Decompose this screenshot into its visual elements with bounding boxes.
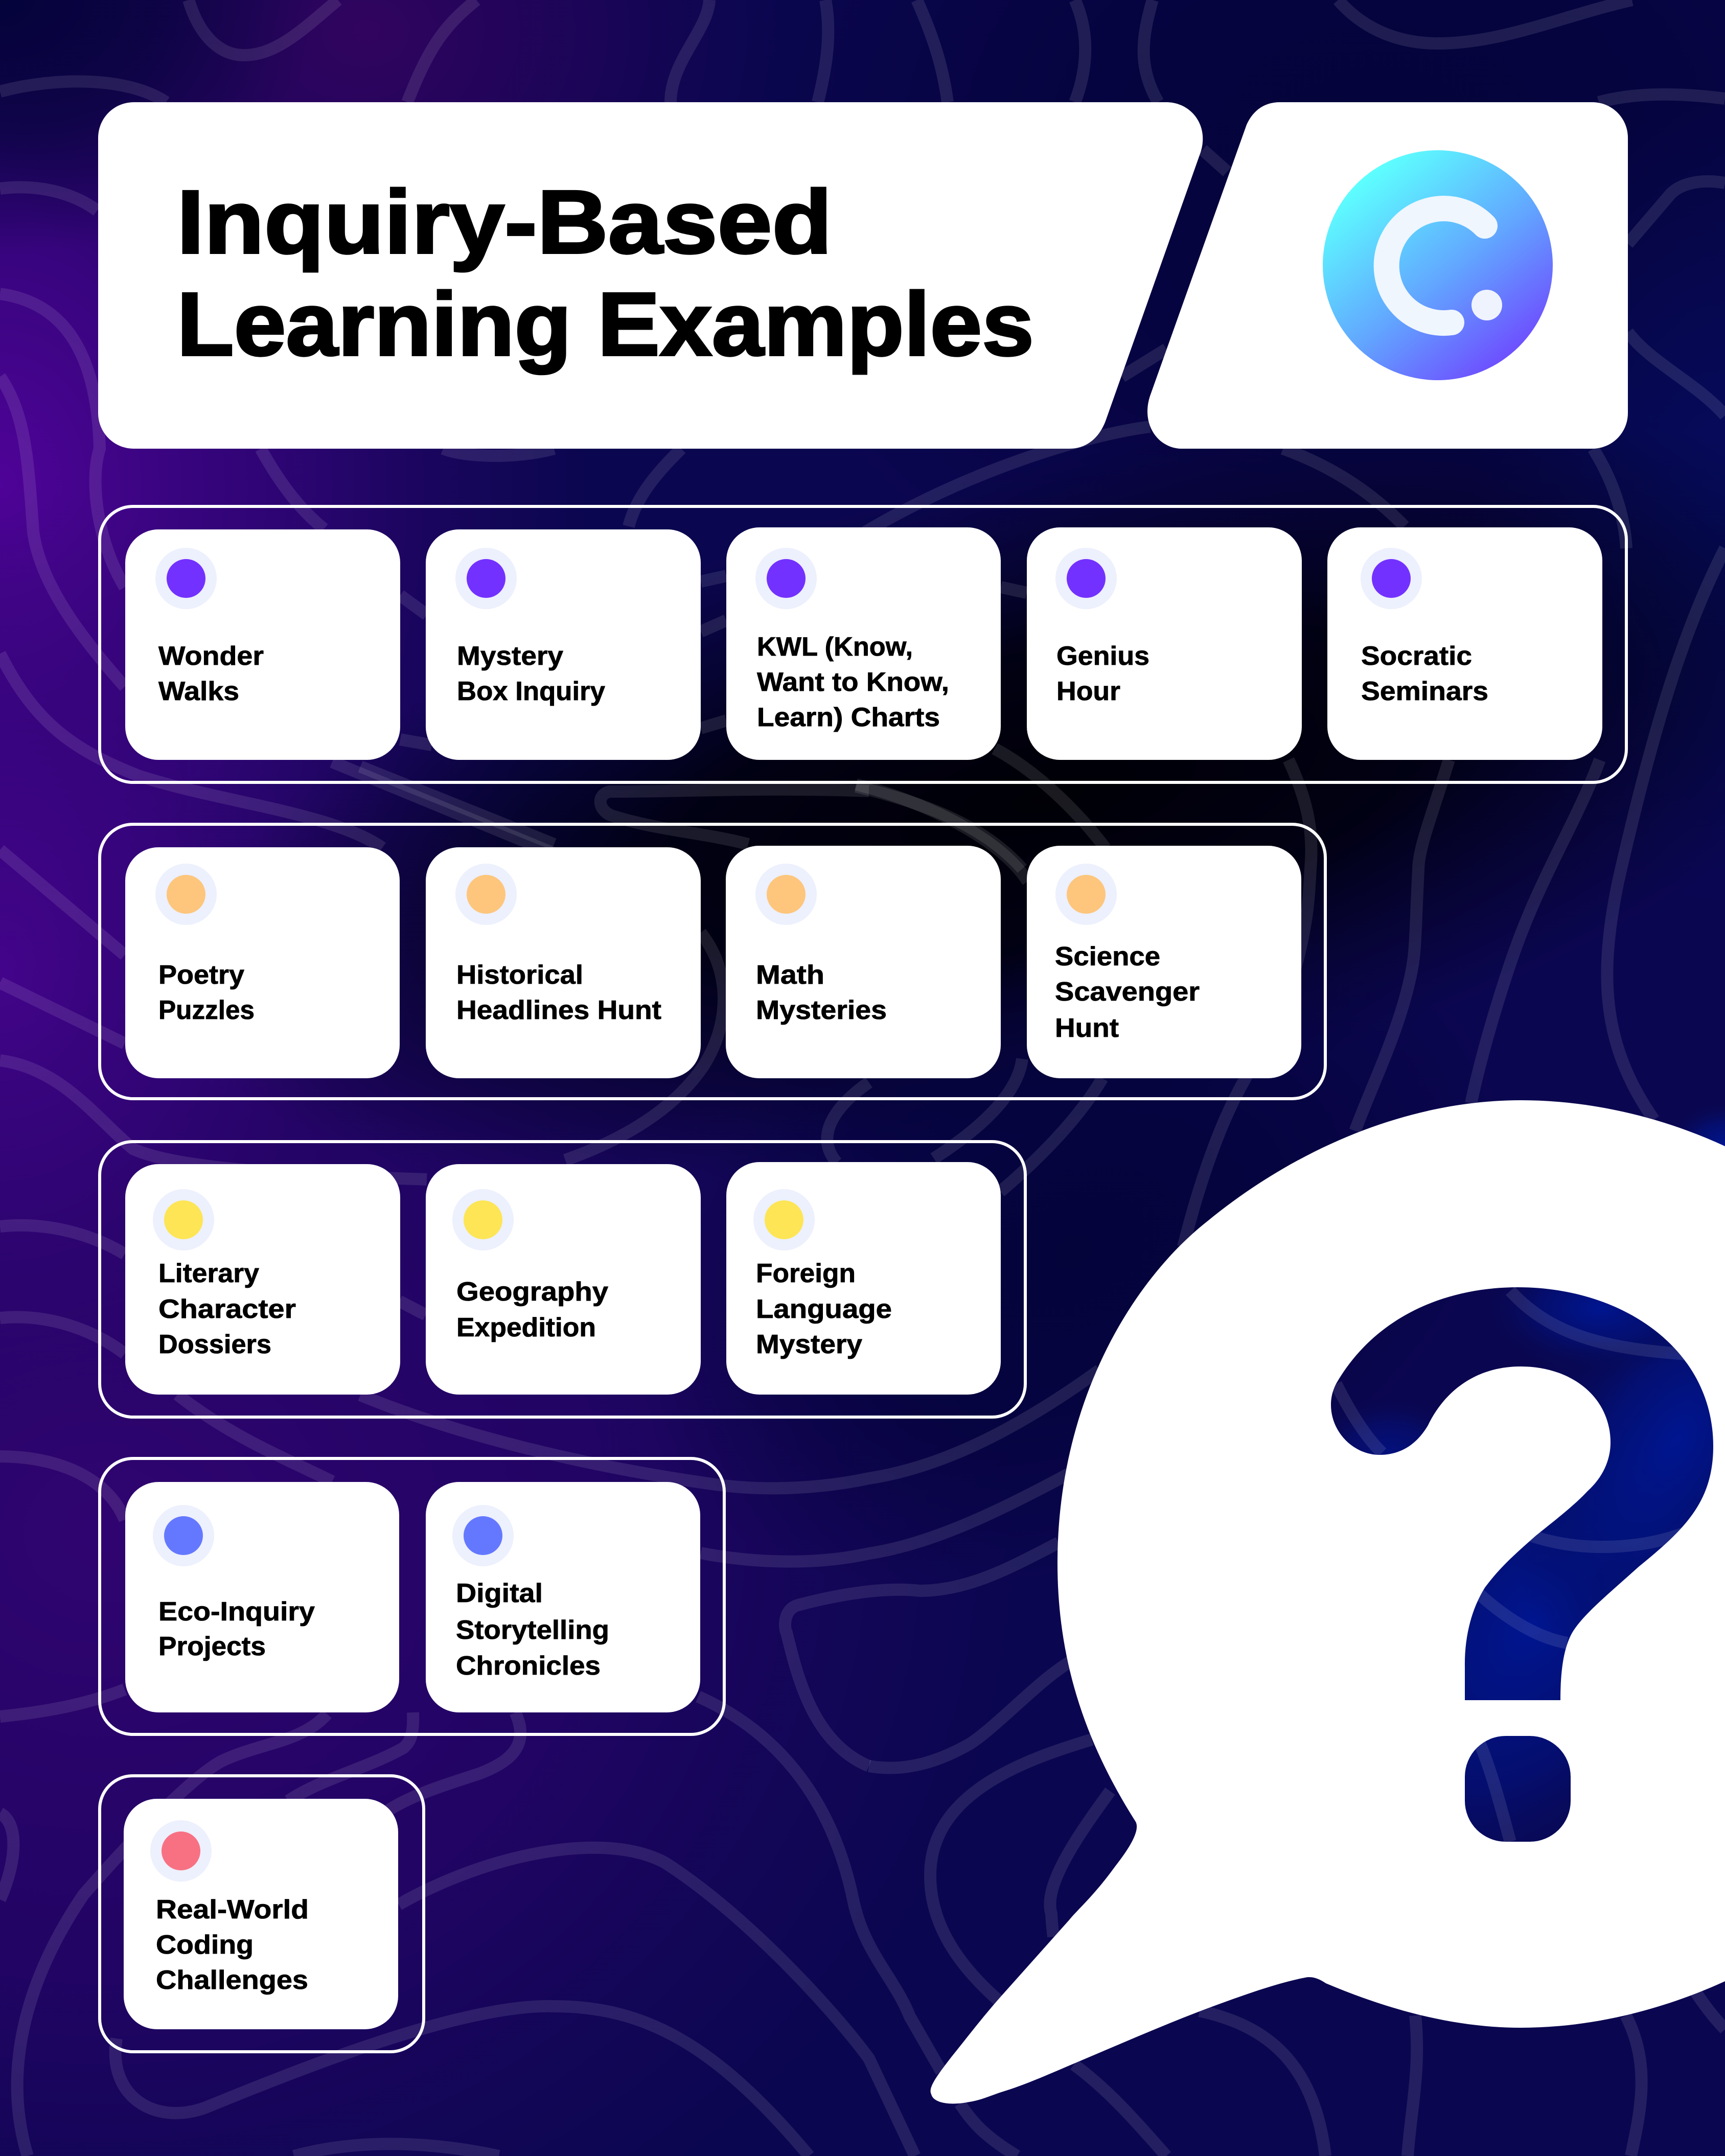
- card: Socratic Seminars: [1327, 527, 1602, 760]
- card: Science Scavenger Hunt: [1027, 846, 1301, 1078]
- card: Historical Headlines Hunt: Historical: [456, 960, 583, 990]
- card: Literary Character Dossiers: Dossiers: [158, 1330, 271, 1359]
- card: Genius Hour: Genius: [1056, 641, 1149, 671]
- card: Socratic Seminars: Seminars: [1361, 677, 1488, 706]
- card: Math Mysteries: Math: [756, 960, 824, 990]
- title: Learning Examples: [177, 274, 1034, 375]
- panel: row 3: [100, 1142, 1025, 1417]
- card: Science Scavenger Hunt: Hunt: [1055, 1013, 1119, 1043]
- card: Poetry Puzzles: Puzzles: [158, 995, 255, 1025]
- card: Foreign Language Mystery: Foreign: [756, 1259, 856, 1288]
- card: Math Mysteries: Mysteries: [756, 995, 887, 1025]
- card: Literary Character Dossiers: Literary: [158, 1259, 259, 1288]
- card: Foreign Language Mystery: Mystery: [756, 1330, 862, 1359]
- card: Genius Hour: Hour: [1056, 677, 1120, 706]
- card: Literary Character Dossiers: Character: [158, 1294, 296, 1324]
- title: [177, 172, 1034, 375]
- card: Digital Storytelling Chronicles: [426, 1482, 700, 1712]
- card: Wonder Walks: Walks: [158, 677, 239, 706]
- card: Wonder Walks: Wonder: [158, 641, 264, 671]
- card: Geography Expedition: Expedition: [456, 1313, 596, 1342]
- card: Socratic Seminars: Socratic: [1361, 641, 1472, 671]
- card: Digital Storytelling Chronicles: Storytelling: [456, 1615, 609, 1645]
- card: Eco-Inquiry Projects: Projects: [158, 1632, 266, 1661]
- card: KWL Charts: KWL (Know,: [757, 632, 913, 662]
- card: Geography Expedition: [426, 1164, 701, 1395]
- card: Poetry Puzzles: Poetry: [158, 960, 244, 990]
- logo panel: [1147, 102, 1628, 449]
- card: Science Scavenger Hunt: Science: [1055, 942, 1160, 971]
- card: KWL Charts: [726, 527, 1001, 760]
- panel: row 4: [100, 1458, 724, 1734]
- card: Eco-Inquiry Projects: Eco-Inquiry: [158, 1597, 315, 1627]
- title: Inquiry-Based: [177, 172, 832, 272]
- card: Foreign Language Mystery: [726, 1162, 1001, 1395]
- card: Science Scavenger Hunt: Scavenger: [1055, 977, 1200, 1007]
- panel: row 2: [100, 824, 1325, 1099]
- card: Mystery Box Inquiry: Mystery: [457, 641, 563, 671]
- card: Historical Headlines Hunt: Headlines Hunt: [456, 995, 661, 1025]
- card: KWL Charts: Want to Know,: [757, 667, 949, 697]
- card: Genius Hour: [1027, 527, 1302, 760]
- card: Foreign Language Mystery: Language: [756, 1294, 892, 1324]
- card: Real-World Coding Challenges: [124, 1799, 398, 2029]
- card: Historical Headlines Hunt: [426, 847, 701, 1078]
- card: Eco-Inquiry Projects: [125, 1482, 399, 1712]
- card: Digital Storytelling Chronicles: Chronicles: [456, 1651, 601, 1681]
- card: Mystery Box Inquiry: [426, 529, 701, 760]
- icon: speech bubble with question mark cutout: [931, 1100, 1725, 2104]
- card: Poetry Puzzles: [125, 847, 400, 1078]
- card: Real-World Coding Challenges: Coding: [156, 1930, 254, 1960]
- card: Digital Storytelling Chronicles: Digital: [456, 1579, 543, 1608]
- card: Real-World Coding Challenges: Challenges: [156, 1965, 308, 1995]
- card: Literary Character Dossiers: [125, 1164, 400, 1395]
- card: Geography Expedition: Geography: [456, 1277, 608, 1307]
- card: KWL Charts: Learn) Charts: [757, 703, 940, 732]
- card: Real-World Coding Challenges: Real-World: [156, 1895, 309, 1925]
- icon: logo: [1323, 150, 1553, 380]
- card: Wonder Walks: [125, 529, 400, 760]
- panel: row 1: [100, 506, 1626, 782]
- card: Mystery Box Inquiry: Box Inquiry: [457, 677, 605, 706]
- title panel: [98, 102, 1203, 449]
- card: Math Mysteries: [726, 846, 1001, 1078]
- panel: row 5: [100, 1776, 424, 2052]
